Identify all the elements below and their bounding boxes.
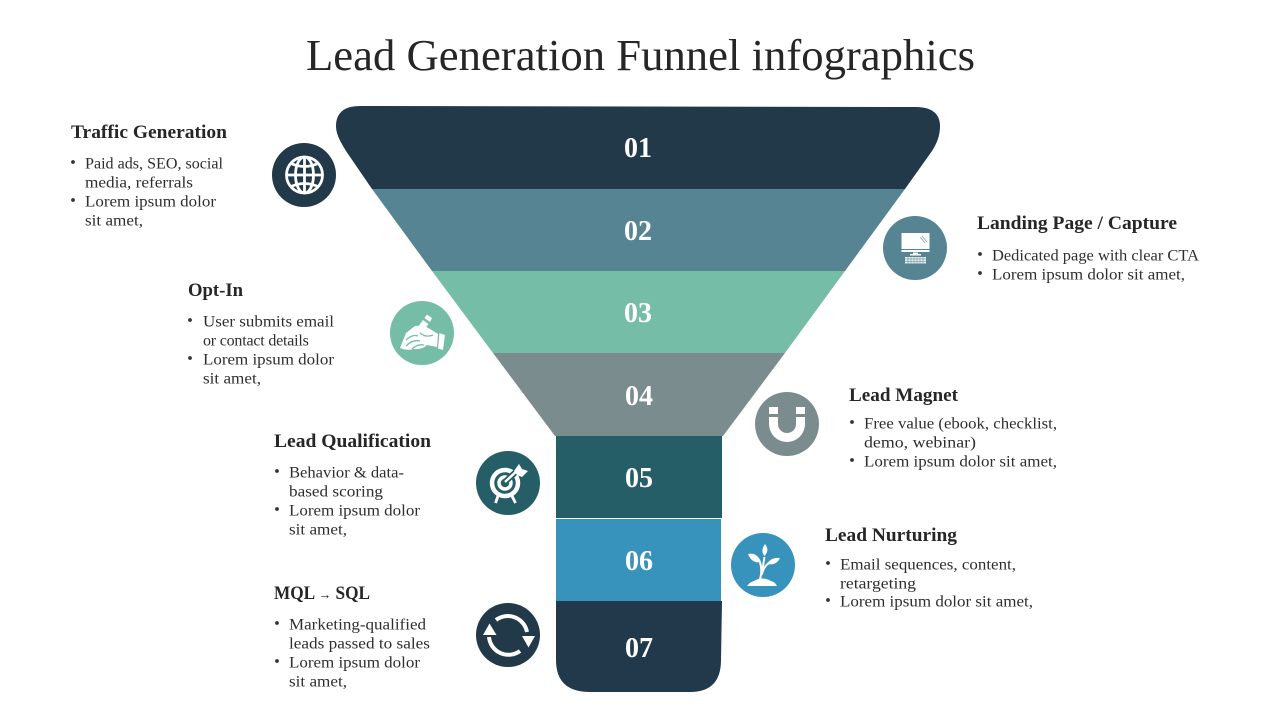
funnel [336,106,940,692]
funnel segment 04: 04 [625,381,653,412]
funnel segment 01: 01 [624,133,652,164]
funnel segment 06 [556,519,721,601]
text block: User submits email [203,314,335,330]
icon: target [476,451,540,515]
funnel segment 07: 07 [625,633,653,664]
text block: or contact details [203,332,309,350]
text block: sit amet, [203,370,261,388]
panel: opt-in [188,280,335,388]
panel: traffic generation [71,122,227,230]
text block: Marketing-qualified [289,616,426,634]
heading: Traffic Generation [71,122,227,143]
heading: MQL → SQL [274,583,370,604]
funnel segment 05: 05 [625,463,653,494]
heading: Opt-In [188,280,243,301]
text block [826,556,1033,610]
title: Lead Generation Funnel infographics [306,31,975,80]
text block: Free value (ebook, checklist, [864,416,1057,432]
text block [275,616,430,690]
text block: Lorem ipsum dolor sit amet, [864,454,1057,470]
text block [850,416,1057,470]
heading: Lead Qualification [274,431,431,452]
funnel segment 02: 02 [624,216,652,247]
text block [71,156,224,230]
text block: Lorem ipsum dolor sit amet, [992,266,1185,284]
text block: based scoring [289,484,383,500]
text block [188,314,335,388]
text block: sit amet, [85,212,143,230]
icon: seedling [731,533,795,597]
funnel segment 07 [556,601,722,692]
text block: media, referrals [85,174,193,192]
heading: Lead Magnet [849,385,959,406]
panel: lead nurturing [825,525,1033,610]
heading: Landing Page / Capture [977,213,1177,234]
text block [978,248,1199,284]
text block: Lorem ipsum dolor sit amet, [840,594,1033,610]
icon: magnet [755,392,819,456]
heading: Lead Nurturing [825,525,957,546]
icon: globe [272,143,336,207]
text block: sit amet, [289,522,347,538]
funnel segment 02 [372,189,905,271]
panel: landing page [977,213,1199,284]
funnel segment 03: 03 [624,298,652,329]
text block: Lorem ipsum dolor [289,654,421,672]
text block: Lorem ipsum dolor [85,194,217,210]
funnel segment 04 [493,353,785,436]
text block: Behavior & data- [289,464,404,482]
panel: lead magnet [849,385,1057,470]
text block: Email sequences, content, [840,556,1016,574]
text block: Dedicated page with clear CTA [992,248,1199,264]
panel: mql to sql [274,583,430,690]
text block: demo, webinar) [864,434,976,452]
text block: Paid ads, SEO, social [85,156,224,172]
text block: leads passed to sales [289,636,430,652]
text block [275,464,421,538]
icon: hand writing [390,301,454,365]
text block: sit amet, [289,674,347,690]
text block: retargeting [840,576,916,592]
funnel segment 03 [432,271,845,353]
funnel segment 05 [556,436,722,518]
text block: Lorem ipsum dolor [289,502,421,520]
text block: Lorem ipsum dolor [203,352,335,368]
panel: lead qualification [274,431,431,538]
icon: refresh arrows [476,603,540,667]
icon: computer [883,216,947,280]
funnel segment 06: 06 [625,546,653,577]
funnel segment 01 [336,106,940,189]
